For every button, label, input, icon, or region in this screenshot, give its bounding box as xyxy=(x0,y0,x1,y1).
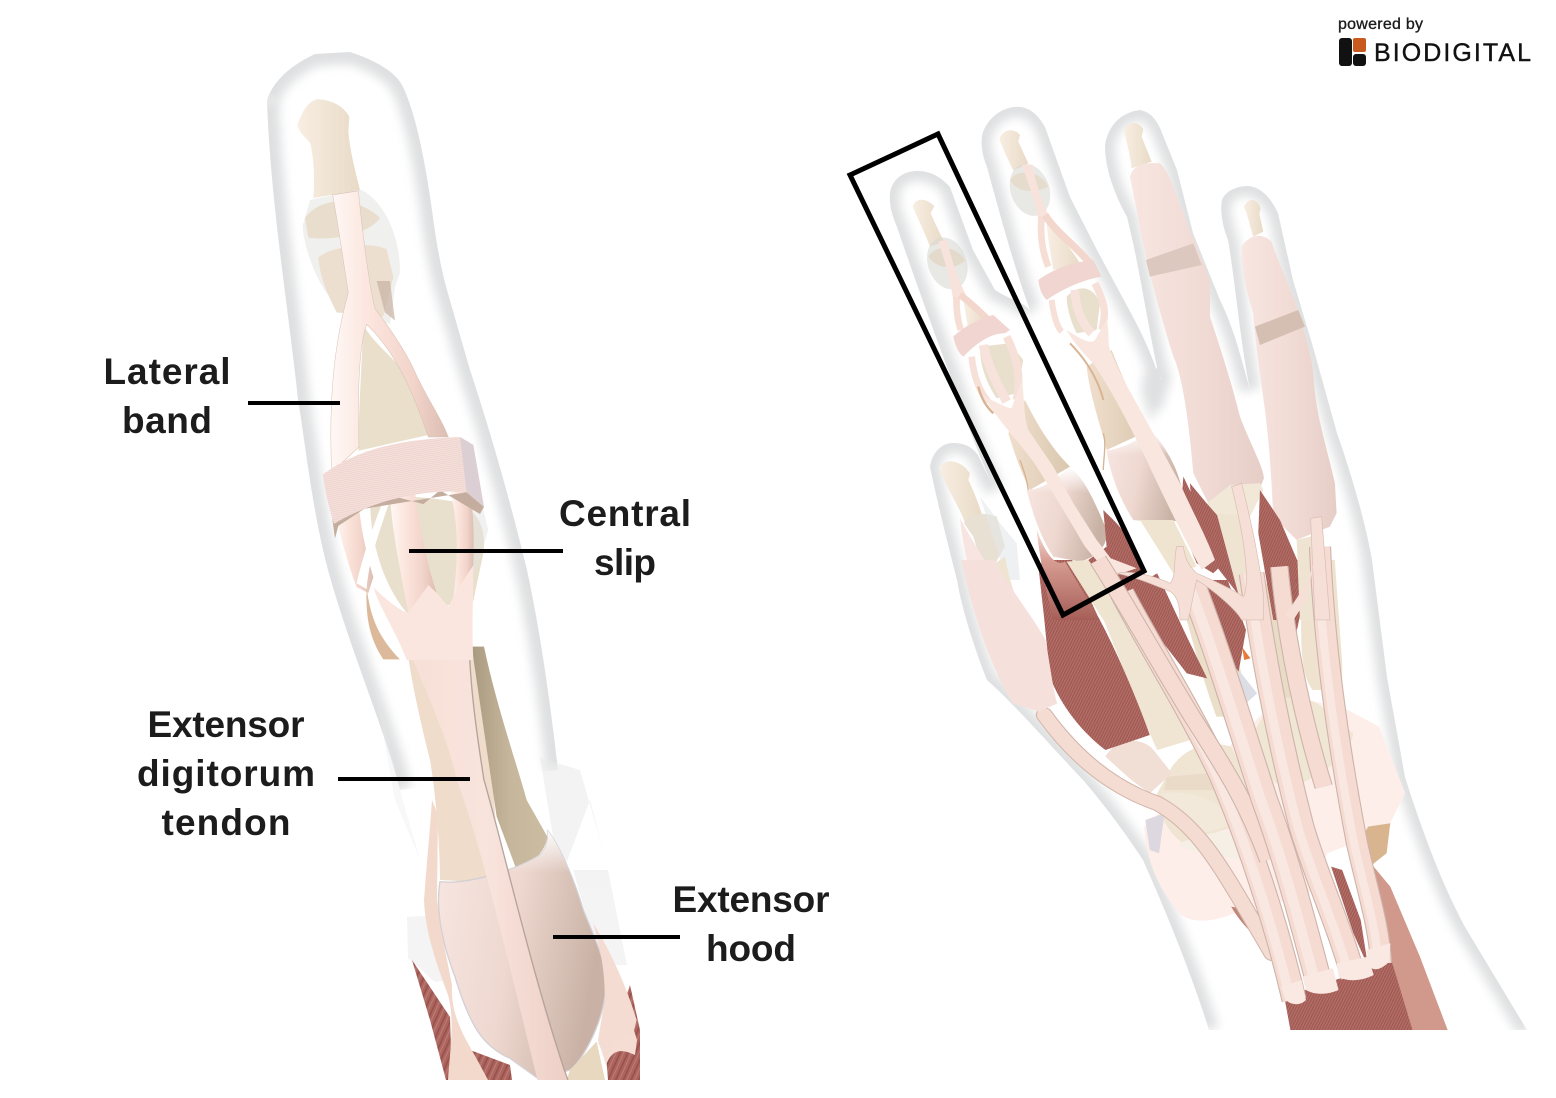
sagittal band xyxy=(323,437,484,538)
lateral bands below sagittal band xyxy=(338,492,474,596)
skin fragments at finger base xyxy=(407,764,627,982)
label: Central slip: Central xyxy=(559,493,691,534)
BioDigital logo: powered by xyxy=(1338,16,1423,33)
tendon fork xyxy=(373,565,473,660)
highlighted finger box xyxy=(850,134,1144,615)
hand illustration xyxy=(890,107,1527,1030)
BioDigital logo: BIODIGITAL xyxy=(1374,39,1531,67)
label: Extensor digitorum tendon: Extensor xyxy=(148,704,304,745)
forearm extensor muscle xyxy=(1285,860,1448,1030)
label: Lateral band xyxy=(104,351,340,441)
middle phalanx bone xyxy=(358,324,428,451)
finger detail illustration xyxy=(267,52,640,1083)
PIP joint xyxy=(370,497,484,613)
label: Extensor hood: hood xyxy=(706,928,796,969)
tendon-muscle junctions xyxy=(1281,943,1390,1004)
proximal phalanx bone right xyxy=(472,647,547,870)
label: Extensor hood: Extensor xyxy=(672,879,830,920)
thumb extensor tendon xyxy=(1044,715,1272,953)
wrist deep structures xyxy=(1039,560,1448,1030)
carpal and metacarpal bones xyxy=(1087,560,1390,865)
extensor tendons in wrist xyxy=(1098,547,1381,1000)
ring finger xyxy=(1124,123,1264,518)
ring and little finger bones and muscle xyxy=(1190,483,1323,620)
label: Lateral band: band xyxy=(122,400,212,441)
distal joint capsule xyxy=(303,189,400,324)
BioDigital logo xyxy=(1338,16,1531,67)
juncturae and ring and little finger tendons xyxy=(1117,483,1330,620)
extensor retinaculum xyxy=(1144,693,1405,921)
extensor hood xyxy=(439,830,606,1080)
proximal phalanx bone left xyxy=(407,647,500,883)
fingers xyxy=(913,123,1337,620)
label: Extensor digitorum tendon: tendon xyxy=(162,802,290,843)
label: Extensor digitorum tendon xyxy=(137,704,470,843)
side tendons at finger base xyxy=(424,800,637,1080)
middle finger xyxy=(999,130,1220,573)
label: Lateral band: Lateral xyxy=(104,351,230,392)
label: Extensor hood xyxy=(553,879,830,969)
right interosseous tendon xyxy=(593,923,637,1060)
terminal tendon and lateral bands xyxy=(331,191,448,473)
label: Central slip xyxy=(409,493,691,583)
first dorsal interosseous muscle xyxy=(1039,560,1150,750)
tan tendon edge xyxy=(366,589,400,659)
finger skin outline xyxy=(267,52,558,790)
hand skin silhouette xyxy=(890,107,1527,1030)
extensor digitorum tendon xyxy=(414,660,567,1080)
label: Central slip: slip xyxy=(594,542,656,583)
index finger xyxy=(913,200,1173,620)
interosseous muscles xyxy=(1131,560,1303,678)
thumb hood xyxy=(961,560,1057,712)
thumb xyxy=(939,461,1027,620)
distal phalanx bone xyxy=(297,99,360,198)
label: Extensor digitorum tendon: digitorum xyxy=(137,753,315,794)
little finger xyxy=(1242,200,1337,540)
muscle remnants xyxy=(412,960,640,1080)
icon: logo mark xyxy=(1339,38,1366,66)
central slip xyxy=(390,492,437,621)
